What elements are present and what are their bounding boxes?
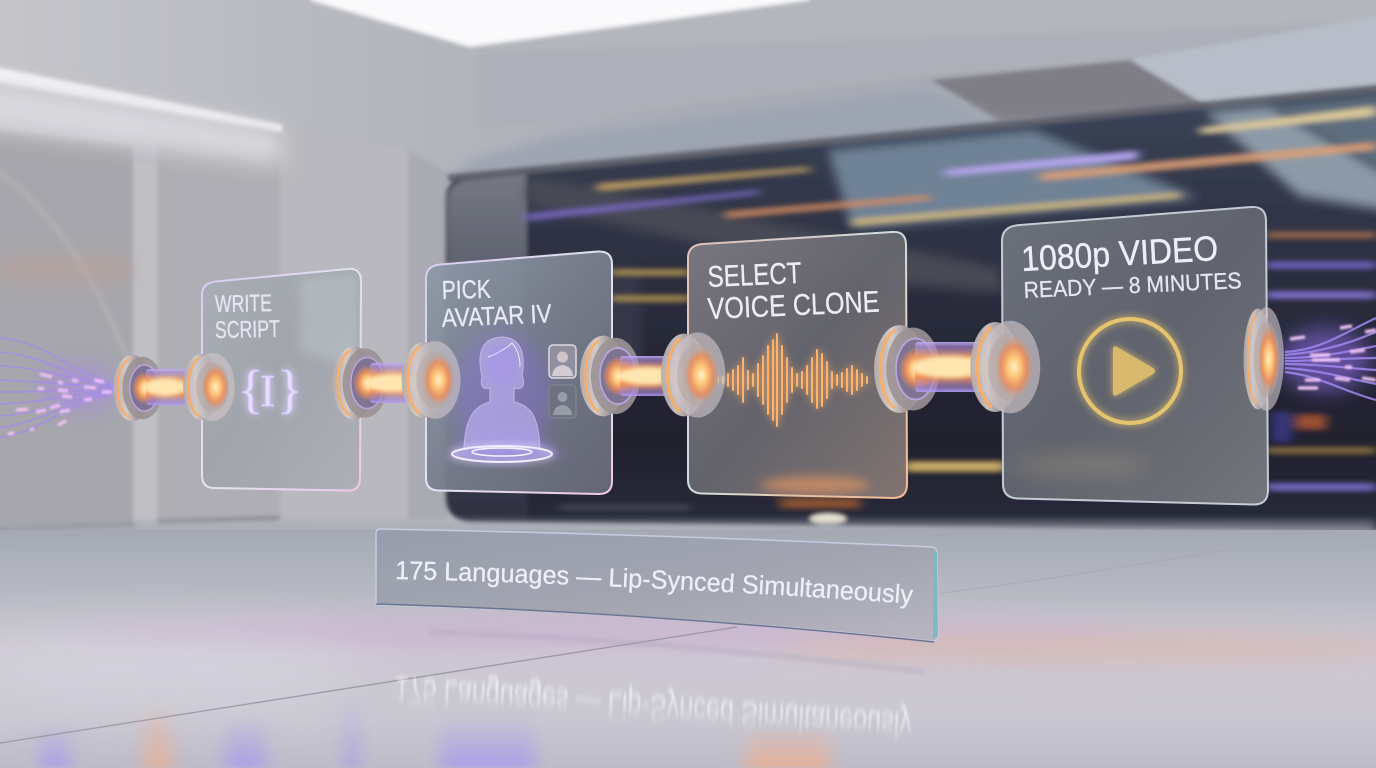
icon: text cursor brackets: I [260,365,275,416]
icon: text cursor brackets: } [277,361,302,419]
panel: 1080p video ready [1002,207,1268,505]
heading: select voice clone: SELECT [707,257,802,294]
heading: 1080p video: 1080p VIDEO [1020,229,1219,279]
icon: text cursor brackets [238,361,302,419]
banner reflection on floor: 175 Languages — Lip-Synced Simultaneously [394,669,913,747]
fibre bundle: right output [1280,318,1376,400]
floor [0,522,1376,768]
background: dark window with motion streaks [446,84,1376,532]
connector: input coupling [113,353,235,421]
heading: select voice clone: VOICE CLONE [707,286,880,326]
heading: pick avatar: AVATAR IV [441,298,553,333]
connector: script to avatar [332,341,460,420]
icon: audio waveform [718,334,867,426]
heading: pick avatar [441,274,553,333]
heading: write script: SCRIPT [215,316,280,344]
heading: write script: WRITE [215,290,272,318]
heading: select voice clone [707,257,880,326]
panel: pick avatar [426,251,612,494]
fibre bundle: left input [0,338,122,438]
icon: holographic avatar [445,333,565,462]
text: languages callout: 175 Languages — Lip-Synced Simultaneously [396,561,914,609]
icon: avatar thumbnail unselected [549,385,576,418]
connector: voice to video [874,321,1040,413]
connector: avatar to voice [580,332,725,418]
connector: output coupling [1244,307,1284,411]
panel: write script [202,269,361,491]
banner: language callout [375,528,939,643]
icon: play button [1079,319,1181,423]
icon: avatar thumbnail selected [549,345,576,378]
text: ready in 8 minutes: READY — 8 MINUTES [1023,267,1242,303]
icon: text cursor brackets: { [238,361,263,419]
panel: select voice clone [688,232,907,498]
heading: pick avatar: PICK [441,274,492,305]
heading: write script [215,290,280,344]
